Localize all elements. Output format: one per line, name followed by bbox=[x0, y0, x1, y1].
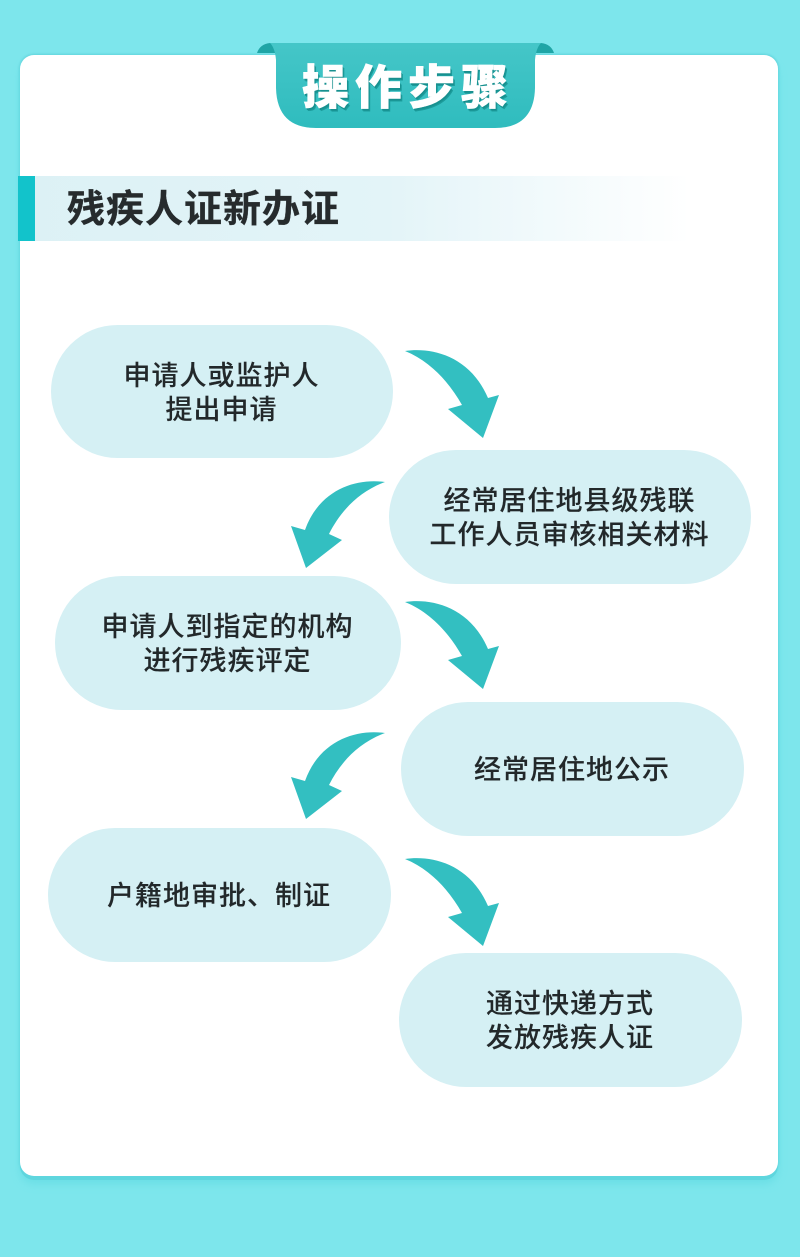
step 1: 申请人或监护人 bbox=[124, 360, 320, 390]
step 5 bbox=[48, 828, 391, 962]
arrow: step 5 to step 6 bbox=[405, 858, 499, 946]
title: 操作步骤 bbox=[302, 61, 514, 114]
step 6 bbox=[399, 953, 742, 1087]
section heading accent bar bbox=[18, 176, 35, 241]
step 1 bbox=[51, 325, 393, 458]
step 4 bbox=[401, 702, 744, 836]
step 1: 提出申请 bbox=[166, 394, 278, 424]
step 4: 经常居住地公示 bbox=[474, 755, 670, 785]
section heading band bbox=[18, 176, 690, 241]
arrow: step 3 to step 4 bbox=[405, 601, 499, 689]
arrow: step 2 to step 3 bbox=[291, 481, 385, 568]
step 5: 户籍地审批、制证 bbox=[107, 881, 331, 911]
step 3: 申请人到指定的机构 bbox=[102, 612, 354, 642]
arrow: step 1 to step 2 bbox=[405, 350, 499, 438]
step 3: 进行残疾评定 bbox=[144, 646, 312, 676]
step 6: 发放残疾人证 bbox=[486, 1023, 654, 1053]
step 2: 工作人员审核相关材料 bbox=[430, 520, 710, 550]
step 2 bbox=[389, 450, 751, 584]
step 6: 通过快递方式 bbox=[486, 989, 654, 1019]
step 2: 经常居住地县级残联 bbox=[444, 486, 696, 516]
section heading: 残疾人证新办证 bbox=[67, 189, 340, 231]
title ribbon bbox=[257, 43, 554, 128]
step 3 bbox=[55, 576, 401, 710]
arrow: step 4 to step 5 bbox=[291, 732, 385, 819]
